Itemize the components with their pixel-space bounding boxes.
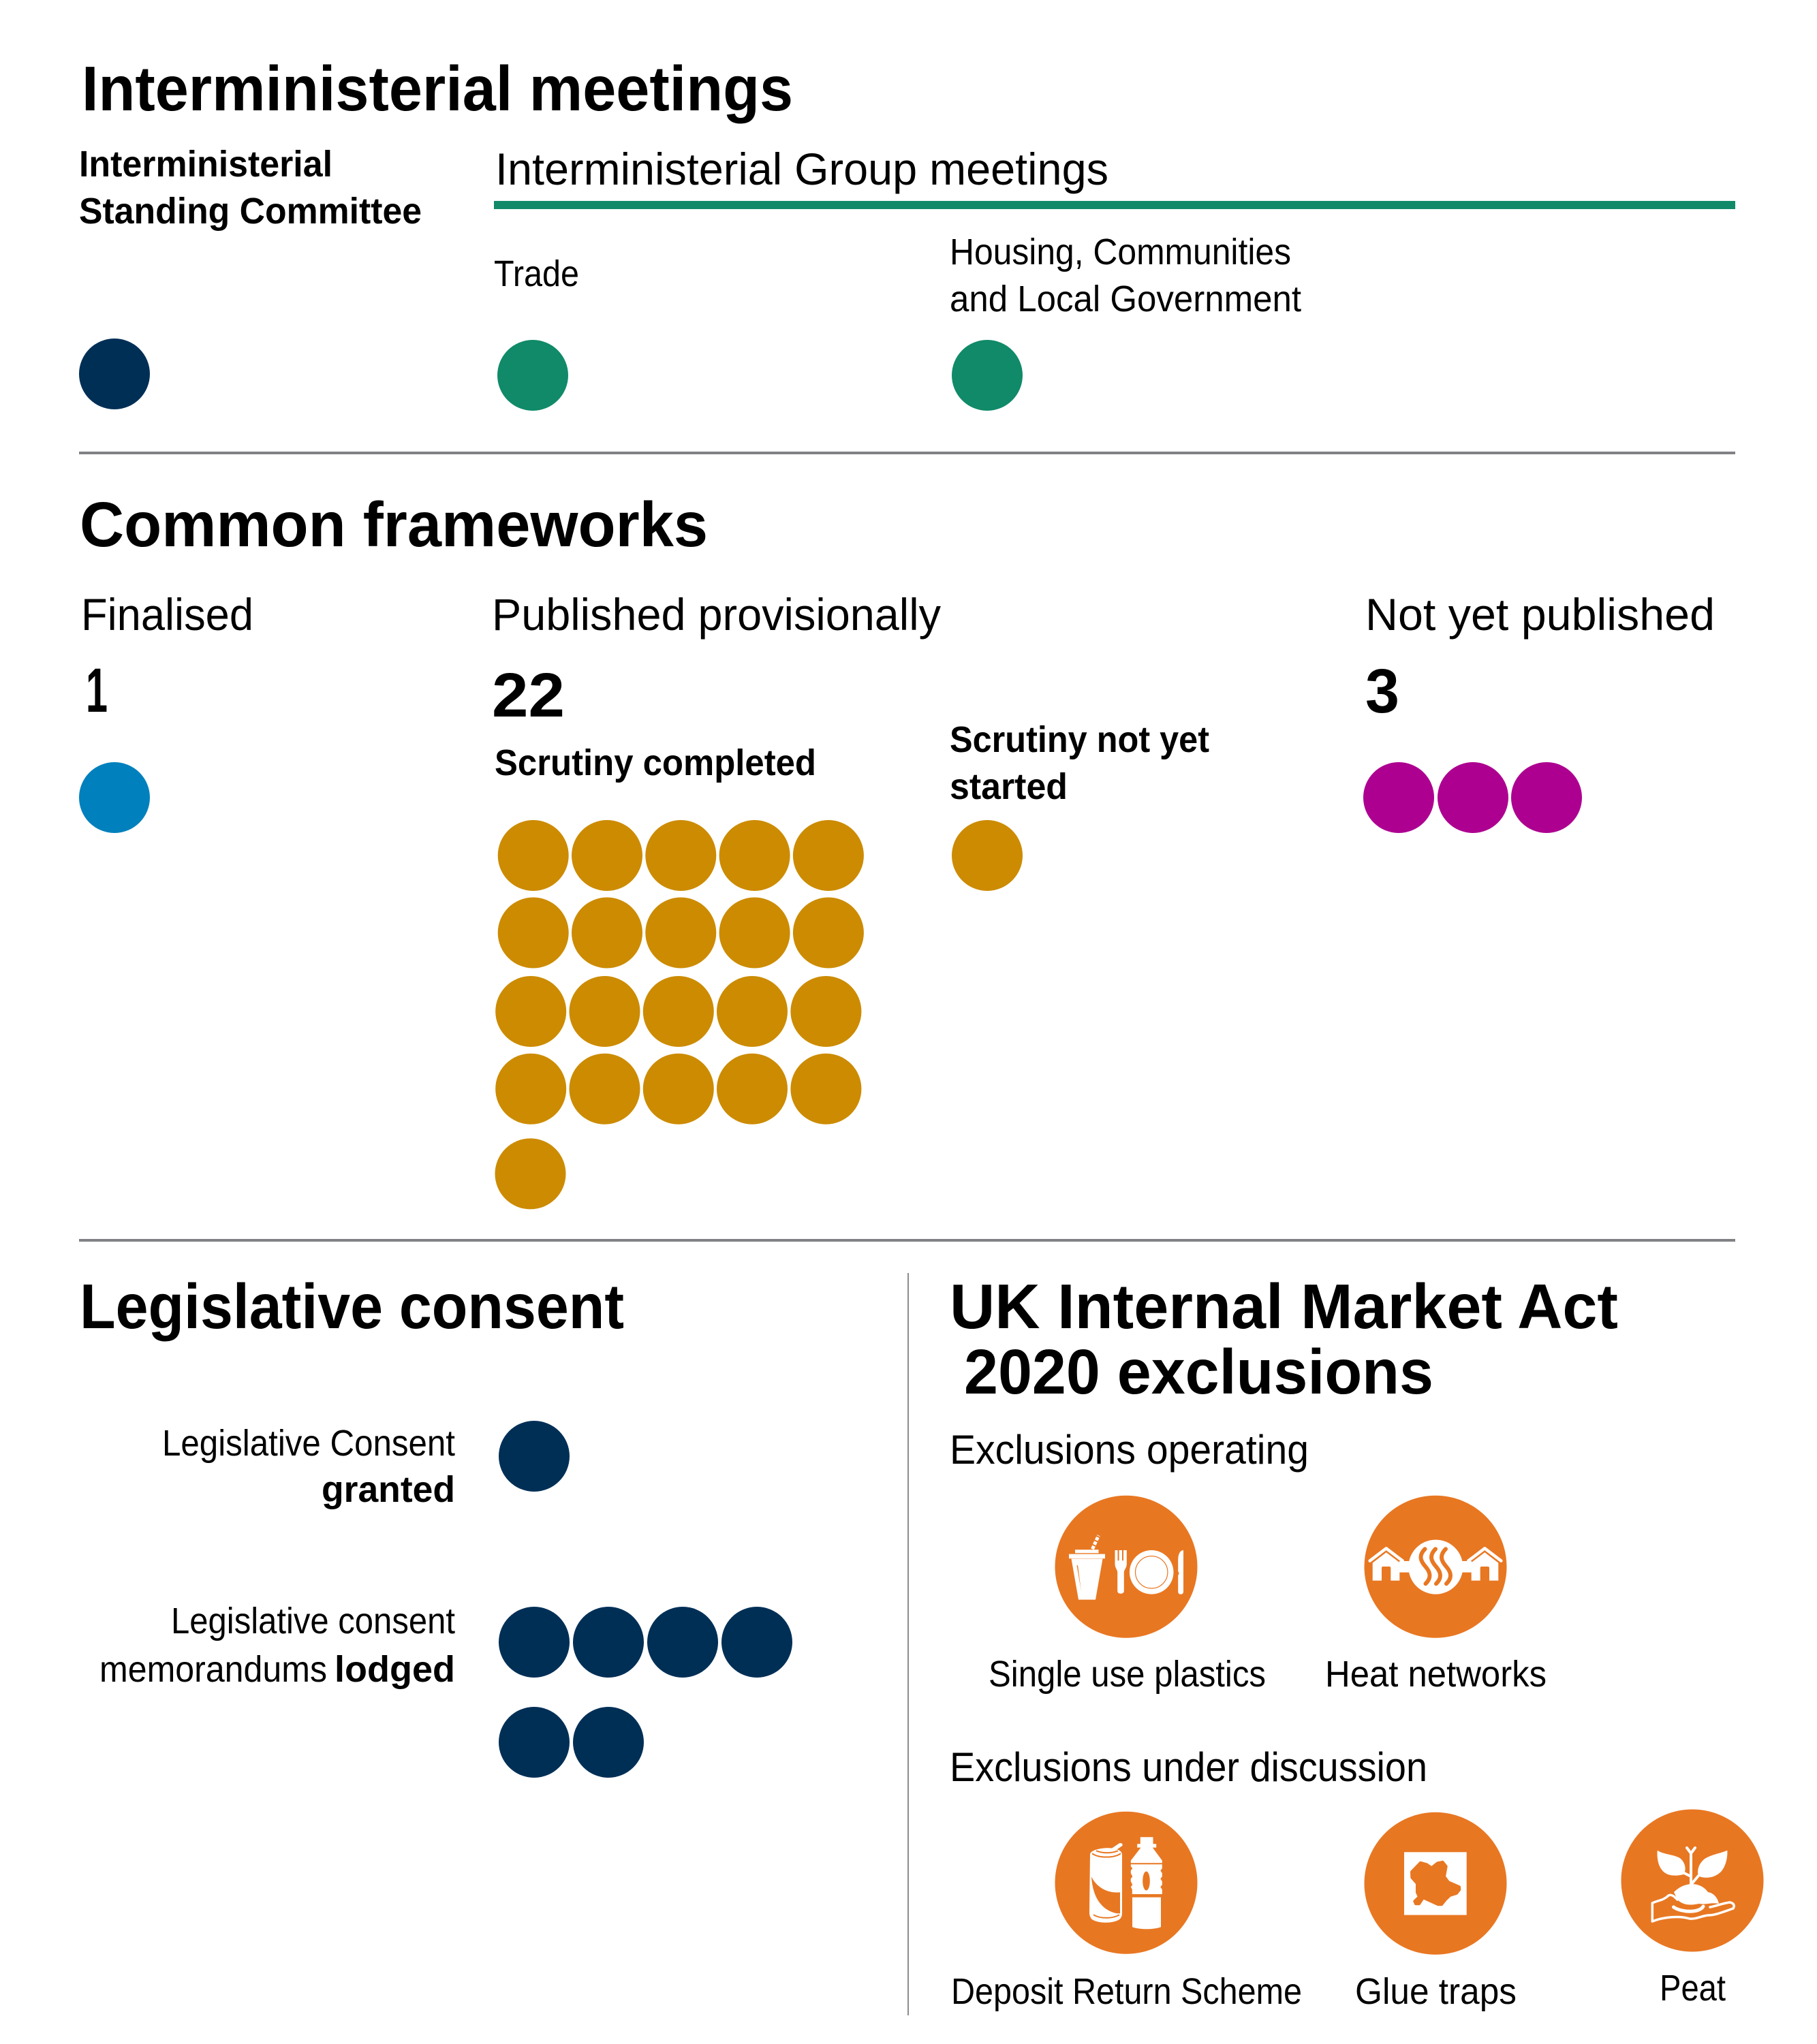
label: Standing Committee: Interministerial	[79, 144, 332, 185]
label: Heat networks: Heat networks	[1325, 1654, 1547, 1695]
icon: heat networks	[1364, 1496, 1507, 1638]
icon: single use plastics	[1055, 1496, 1198, 1638]
dot: finalised	[79, 762, 150, 833]
number: 1: 1	[86, 656, 108, 725]
rule: group meetings	[494, 201, 1735, 209]
label: Not yet published: Not yet published	[1365, 589, 1715, 640]
panel: Published provisionally	[492, 589, 1209, 1209]
label: consent granted	[162, 1423, 455, 1510]
label: Housing: and Local Government	[950, 279, 1301, 319]
panel: UK Internal Market Act exclusions	[950, 1271, 1763, 2012]
label: Glue traps: Glue traps	[1355, 1971, 1517, 2012]
label: Finalised: Finalised	[81, 589, 253, 640]
dots: memorandums lodged	[499, 1607, 792, 1778]
subheading: Exclusions under discussion: Exclusions under discussion	[950, 1744, 1427, 1790]
icon: peat	[1621, 1809, 1763, 1952]
heading: UK Internal Market Act 2020 exclusions: UK Internal Market Act	[950, 1271, 1618, 1342]
icon: glue traps	[1364, 1812, 1507, 1955]
dot: scrutiny not yet started	[952, 820, 1023, 891]
label: Published provisionally: Published provisionally	[492, 589, 941, 640]
dot: standing committee meeting	[79, 339, 150, 409]
label: Deposit Return Scheme: Deposit Return Scheme	[951, 1971, 1302, 2012]
number: 22: 22	[492, 661, 565, 730]
number: 3: 3	[1365, 657, 1399, 726]
label: memorandums lodged: memorandums	[99, 1649, 327, 1690]
icon: deposit return scheme	[1055, 1812, 1198, 1954]
dot: Trade meeting	[497, 340, 568, 411]
label: consent granted: granted	[322, 1469, 455, 1510]
label: memorandums lodged: Legislative consent	[171, 1601, 455, 1641]
panel: Not yet published	[1363, 589, 1715, 833]
label: Scrutiny completed: Scrutiny completed	[495, 742, 816, 783]
heading: group meetings: Interministerial Group meetings	[495, 144, 1108, 194]
label: Scrutiny not yet started: Scrutiny not yet	[950, 719, 1209, 760]
label: Housing: Housing, Communities	[950, 232, 1291, 272]
label: Trade: Trade	[494, 253, 579, 294]
dots: not yet published	[1363, 762, 1582, 833]
label: Standing Committee	[79, 144, 422, 232]
subheading: Exclusions operating: Exclusions operating	[950, 1427, 1309, 1473]
label: memorandums lodged	[99, 1601, 455, 1690]
label: Single use plastics: Single use plastics	[989, 1654, 1266, 1695]
heading: UK Internal Market Act 2020 exclusions	[950, 1271, 1618, 1407]
heading: Common frameworks: Common frameworks	[80, 489, 708, 560]
heading: Legislative consent: Legislative consent	[80, 1271, 624, 1342]
label: Scrutiny not yet started: started	[950, 766, 1068, 807]
heading: UK Internal Market Act 2020 exclusions: 2020 exclusions	[964, 1336, 1433, 1407]
label: Peat: Peat	[1660, 1968, 1726, 2009]
panel: Interministerial Group meetings	[494, 144, 1735, 411]
title: Interministerial meetings: Interministerial meetings	[82, 53, 793, 124]
dots: scrutiny completed	[495, 820, 864, 1209]
label: Housing	[950, 232, 1301, 319]
dot: Housing meeting	[952, 340, 1023, 411]
panel: Interministerial Standing Committee	[79, 144, 422, 409]
label: Scrutiny not yet started	[950, 719, 1209, 807]
dot: consent granted	[499, 1421, 570, 1492]
label: Standing Committee: Standing Committee	[79, 191, 422, 232]
label: memorandums lodged: lodged	[335, 1649, 455, 1690]
panel: Legislative consent	[80, 1271, 792, 1778]
label: consent granted: Legislative Consent	[162, 1423, 455, 1464]
panel: Finalised	[79, 589, 253, 833]
